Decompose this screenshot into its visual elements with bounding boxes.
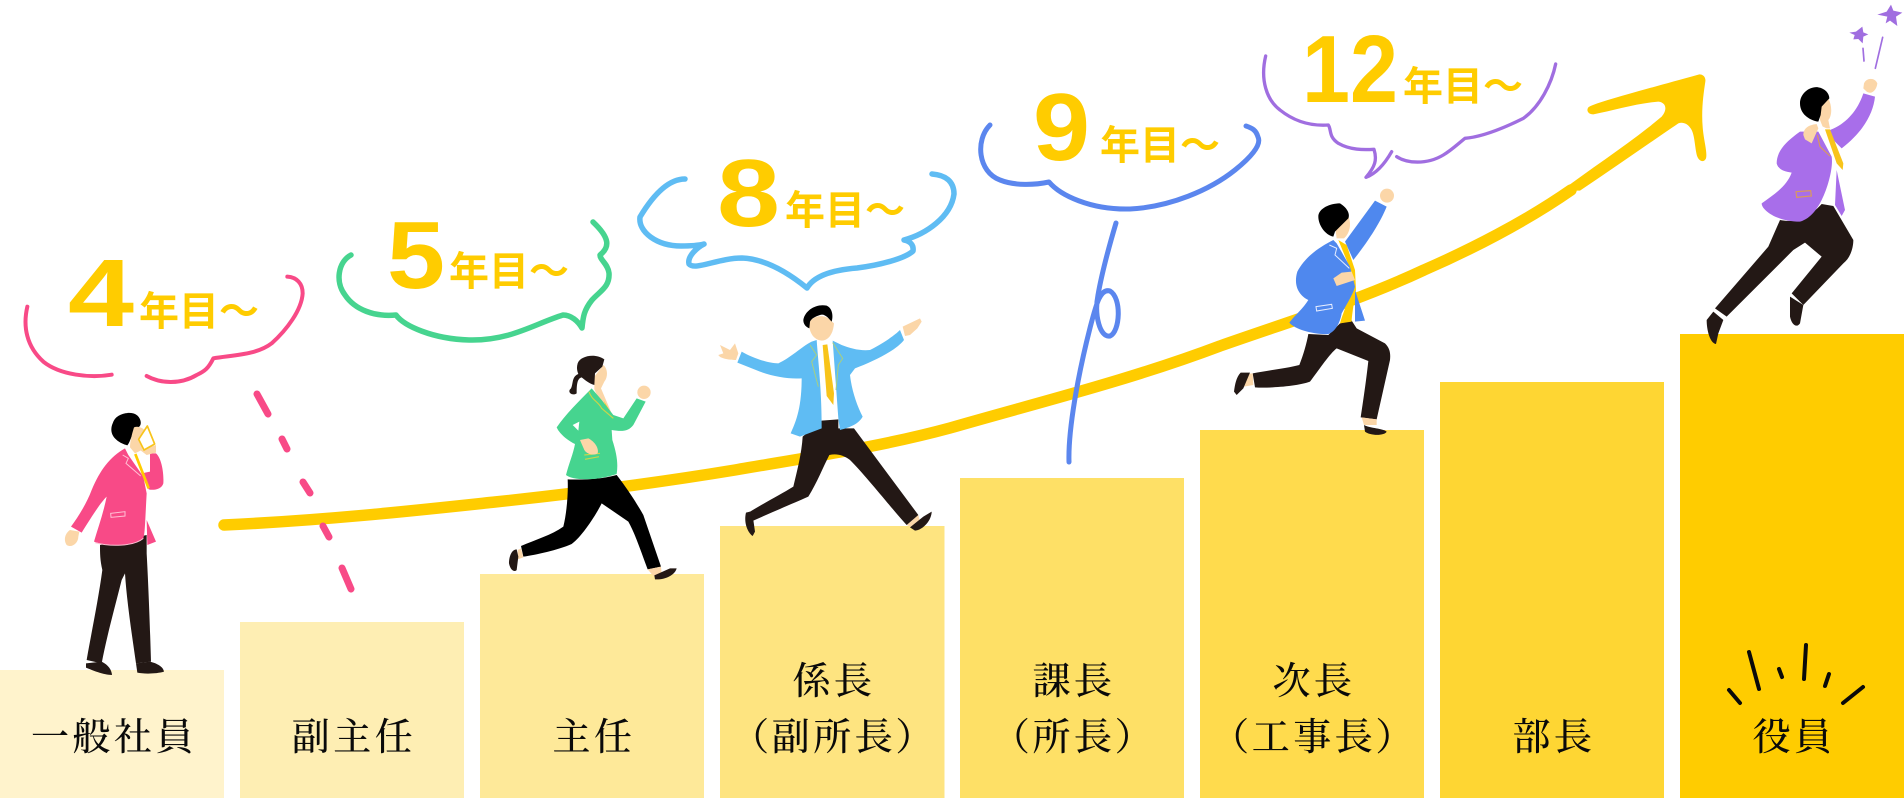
- callout: 5年目〜: [339, 202, 609, 340]
- bar: 一般社員: [0, 670, 224, 798]
- label: 次長（工事長）: 次長: [1272, 661, 1356, 703]
- figure: lunging man, blue jacket: [1234, 189, 1394, 435]
- text 年目〜: 年目〜: [1403, 65, 1523, 109]
- bar: 役員: [1680, 334, 1904, 798]
- icon: stars and sparkle: [1849, 5, 1902, 68]
- number 9: 9: [1033, 74, 1090, 181]
- bar: 副主任: [240, 622, 464, 798]
- callout: 12年目〜: [1264, 16, 1556, 177]
- bubble tail: pink dashes: [257, 394, 351, 589]
- label: 次長（工事長）: （工事長）: [1229, 717, 1399, 759]
- label: 副主任: 副主任: [292, 717, 416, 759]
- figure: running woman, green jacket: [509, 356, 677, 579]
- arrow: rising career trend: [224, 74, 1706, 525]
- label: 課長（所長）: （所長）: [1010, 717, 1138, 759]
- bubble outline: pink: [26, 277, 303, 382]
- text 年目〜: 年目〜: [1100, 124, 1220, 168]
- figure: man with open arms, light blue jacket: [718, 305, 932, 536]
- callout: 4年目〜: [26, 240, 351, 589]
- label: 一般社員: 一般社員: [31, 717, 197, 759]
- number 12: 12: [1302, 16, 1398, 123]
- figure: leaping executive, purple jacket: [1707, 5, 1902, 344]
- label: 主任: 主任: [552, 717, 636, 759]
- label: 課長（所長）: 課長: [1032, 661, 1116, 703]
- label: 役員: 役員: [1752, 717, 1836, 759]
- bar: 主任: [480, 574, 704, 798]
- label: 係長（副所長）: （副所長）: [749, 717, 919, 759]
- text 年目〜: 年目〜: [449, 250, 569, 294]
- bubble tail: blue loop: [1069, 223, 1118, 462]
- bubble outline: light blue: [640, 174, 954, 288]
- number 8: 8: [717, 140, 780, 247]
- number 5: 5: [387, 202, 445, 309]
- callout: 9年目〜: [981, 74, 1259, 462]
- bubble outline: purple: [1264, 56, 1556, 177]
- text 年目〜: 年目〜: [139, 290, 259, 334]
- bubble outline: blue: [981, 125, 1259, 209]
- bubble outline: green: [339, 222, 609, 340]
- figure: standing employee on phone, pink jacket: [65, 413, 164, 675]
- step bars: [0, 334, 1904, 798]
- label: 係長（副所長）: 係長: [792, 661, 876, 703]
- bar: 部長: [1440, 382, 1664, 798]
- number 4: 4: [68, 240, 134, 347]
- label: 部長: 部長: [1512, 717, 1596, 759]
- bar: 課長: [960, 478, 1184, 798]
- text 年目〜: 年目〜: [785, 189, 905, 233]
- callout: 8年目〜: [640, 140, 954, 288]
- step labels: [31, 661, 1836, 759]
- bar: 係長: [720, 526, 944, 798]
- icon: sparkle lines above 役員: [1729, 645, 1863, 703]
- bar: 次長: [1200, 430, 1424, 798]
